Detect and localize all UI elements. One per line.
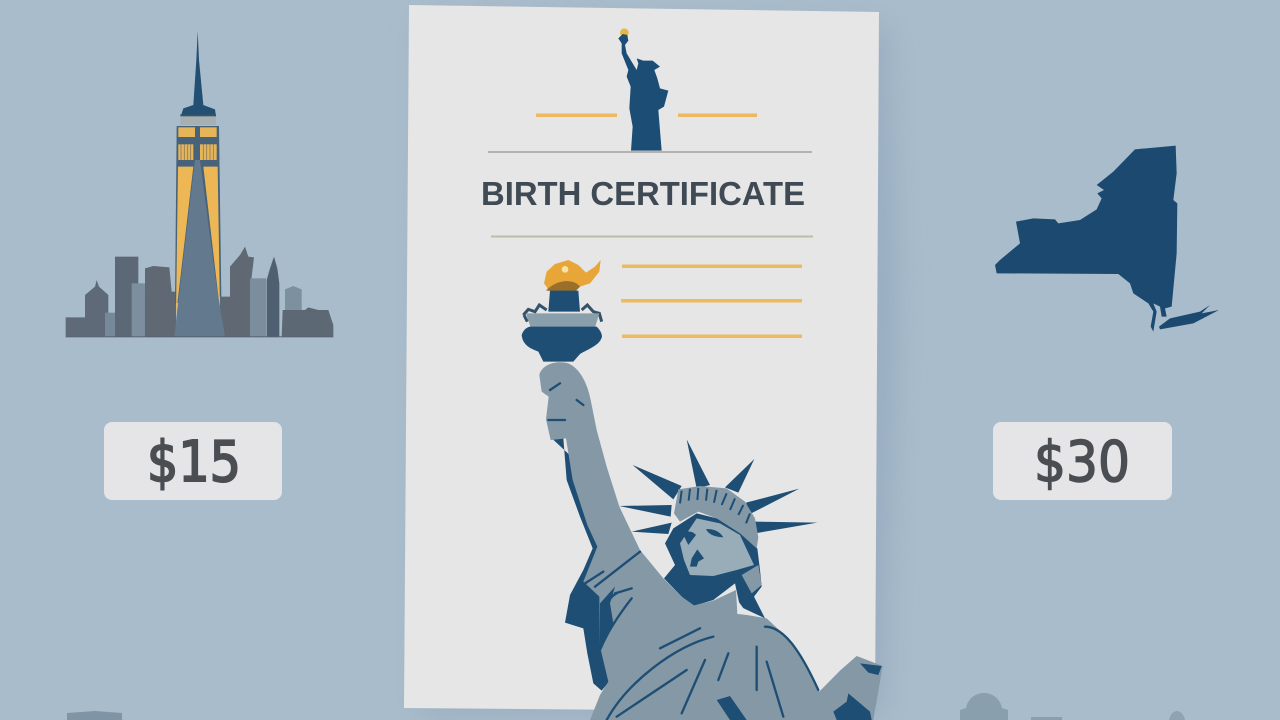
hair curl: [742, 565, 762, 593]
icon: One World Trade Center skyline: [66, 31, 333, 337]
crown detail lines: [680, 488, 750, 523]
icon: small Statue of Liberty silhouette: [618, 28, 668, 151]
distant small dome far right: [1169, 711, 1185, 720]
decorative gold rule right of statue: [678, 114, 757, 117]
crown band: [674, 486, 758, 548]
paper notch beside hair: [737, 600, 748, 615]
document text placeholder line 3: [622, 334, 802, 338]
facial features: [683, 529, 723, 567]
distant low building bottom right: [1031, 717, 1062, 720]
robe folds: [548, 383, 818, 720]
document text placeholder line 2: [621, 299, 802, 302]
rule below title: [491, 236, 813, 238]
panel: birth certificate document: [404, 5, 900, 715]
window mullions: [181, 144, 213, 160]
tower: [174, 31, 225, 337]
price label: $15: [104, 422, 282, 500]
icon: New York State map: [995, 146, 1219, 332]
rule above title: [488, 151, 812, 153]
sleeve and hand shadows: [600, 587, 882, 720]
face: [680, 518, 754, 576]
document text placeholder line 1: [622, 264, 802, 268]
robe and raised arm: [539, 362, 883, 720]
crown rays: [619, 439, 817, 534]
hair and neck shadow: [664, 513, 765, 618]
price text: $15: $15: [147, 430, 241, 495]
torch: [522, 260, 602, 362]
distant domed building bottom right: [960, 693, 1008, 720]
decorative gold rule left of statue: [536, 114, 617, 117]
heading: birth certificate: BIRTH CERTIFICATE: [481, 175, 805, 212]
distant building bottom left: [67, 711, 122, 720]
skyline buildings: [66, 247, 333, 337]
price label: $30: [993, 422, 1172, 500]
price text: $30: $30: [1034, 430, 1130, 495]
shadow under arm and robe: [550, 437, 613, 691]
icon: Statue of Liberty foreground: [522, 260, 883, 720]
